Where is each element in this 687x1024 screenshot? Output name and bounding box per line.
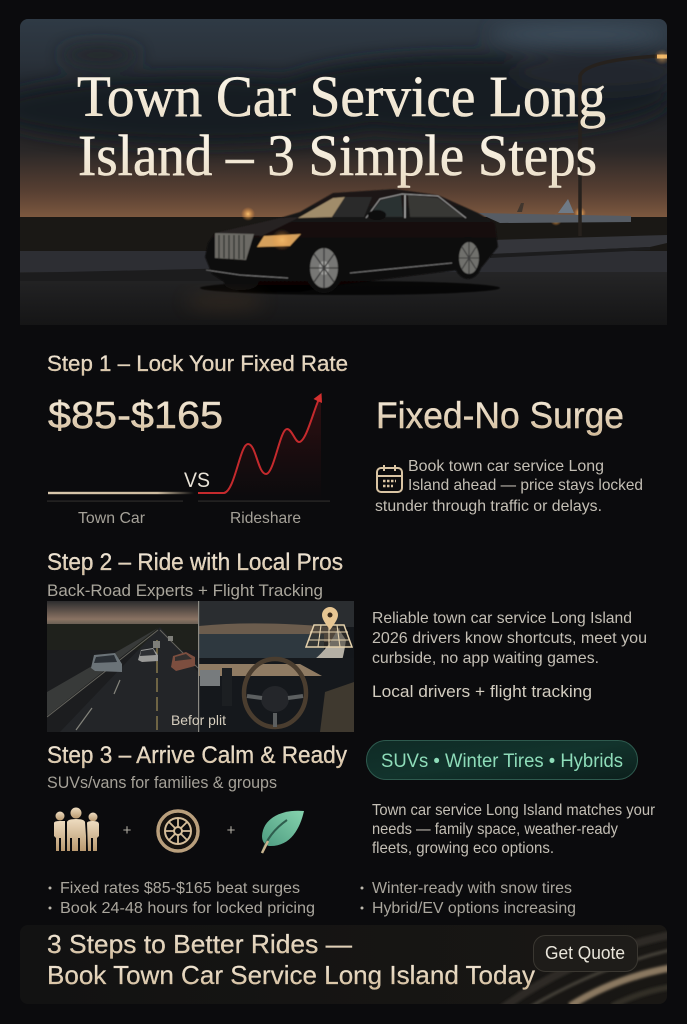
feature pill	[366, 740, 638, 780]
vs label: VS	[184, 469, 210, 492]
icon: leaf	[262, 811, 304, 853]
highway cars	[91, 636, 195, 672]
photo: dashboard	[199, 601, 354, 732]
price comparison chart	[47, 393, 330, 527]
headlight	[257, 234, 301, 247]
bullet list: left: Book 24-48 hours for locked pricing	[60, 900, 315, 917]
step 2 description: Reliable town car service Long Island	[372, 610, 632, 627]
step 3 heading: Step 3 – Arrive Calm & Ready	[47, 742, 347, 769]
step 2 heading: Step 2 – Ride with Local Pros	[47, 549, 343, 576]
plus sign: +	[123, 822, 132, 839]
hero photo panel	[0, 19, 687, 325]
rideshare surge line	[198, 399, 319, 493]
bullet list: right: Hybrid/EV options increasing	[372, 900, 576, 917]
feature pill: SUVs • Winter Tires • Hybrids	[381, 751, 623, 772]
step 1 description: Island ahead — price stays locked	[408, 477, 643, 494]
step 2 description: 2026 drivers know shortcuts, meet you	[372, 630, 647, 647]
step 2 description	[372, 610, 647, 667]
title: Island – 3 Simple Steps	[78, 123, 597, 188]
grille	[215, 233, 254, 260]
horizon lights	[242, 208, 254, 220]
plus sign: +	[227, 822, 236, 839]
step 1 description: Book town car service Long	[408, 458, 604, 475]
photo: highway	[47, 601, 198, 732]
windshield	[298, 197, 345, 218]
photo caption: Befor plit	[171, 712, 226, 728]
step 3 description: needs — family space, weather-ready	[372, 821, 618, 838]
ground and road	[20, 217, 667, 253]
headlight glow on road	[198, 291, 252, 311]
rear wheel	[456, 237, 482, 280]
side windows	[374, 196, 403, 218]
split photo: highway and dashboard	[47, 601, 354, 732]
icon: tire	[158, 811, 198, 851]
step 2 description: curbside, no app waiting games.	[372, 650, 599, 667]
fixed no surge heading: Fixed-No Surge	[376, 395, 624, 436]
street lamp	[580, 49, 670, 236]
step 2 feature line: Local drivers + flight tracking	[372, 682, 592, 701]
title: Town Car Service Long	[77, 64, 606, 129]
get quote button	[534, 936, 638, 972]
decorative car curves	[500, 935, 670, 1010]
chrome lines	[206, 263, 452, 278]
step 3 subheading: SUVs/vans for families & groups	[47, 773, 277, 792]
step 1 description: stunder through traffic or delays.	[375, 498, 602, 515]
bullet list: right	[360, 880, 576, 917]
footer banner	[48, 925, 667, 1004]
step 1 description	[375, 458, 643, 515]
icon: map pin on grid	[306, 607, 352, 647]
town car label: Town Car	[78, 510, 146, 527]
step 1 heading: Step 1 – Lock Your Fixed Rate	[47, 351, 348, 376]
icon: calendar	[377, 465, 402, 492]
bullet list: right: Winter-ready with snow tires	[372, 880, 572, 897]
step 2 subheading: Back-Road Experts + Flight Tracking	[47, 581, 323, 600]
arrow head	[314, 393, 322, 403]
footer banner: Book Town Car Service Long Island Today	[47, 960, 535, 990]
steering wheel	[244, 659, 306, 727]
storm clouds	[0, 24, 687, 144]
title	[77, 64, 606, 188]
town car flat line	[48, 492, 194, 494]
step 3 description: Town car service Long Island matches your	[372, 802, 656, 819]
icon: family	[54, 808, 99, 851]
price range: $85-$165	[48, 395, 223, 437]
step 3 description: fleets, growing eco options.	[372, 840, 554, 857]
mirror	[368, 210, 386, 220]
front wheel	[308, 247, 341, 293]
bullet list: left	[48, 880, 315, 917]
airplane	[478, 199, 631, 223]
black town car	[200, 189, 500, 295]
bullet list: left: Fixed rates $85-$165 beat surges	[60, 880, 300, 897]
step 3 description	[372, 802, 656, 857]
get quote button: Get Quote	[545, 943, 625, 963]
call to action text: 3 Steps to Better Rides —	[47, 929, 352, 959]
rideshare label: Rideshare	[230, 510, 301, 527]
